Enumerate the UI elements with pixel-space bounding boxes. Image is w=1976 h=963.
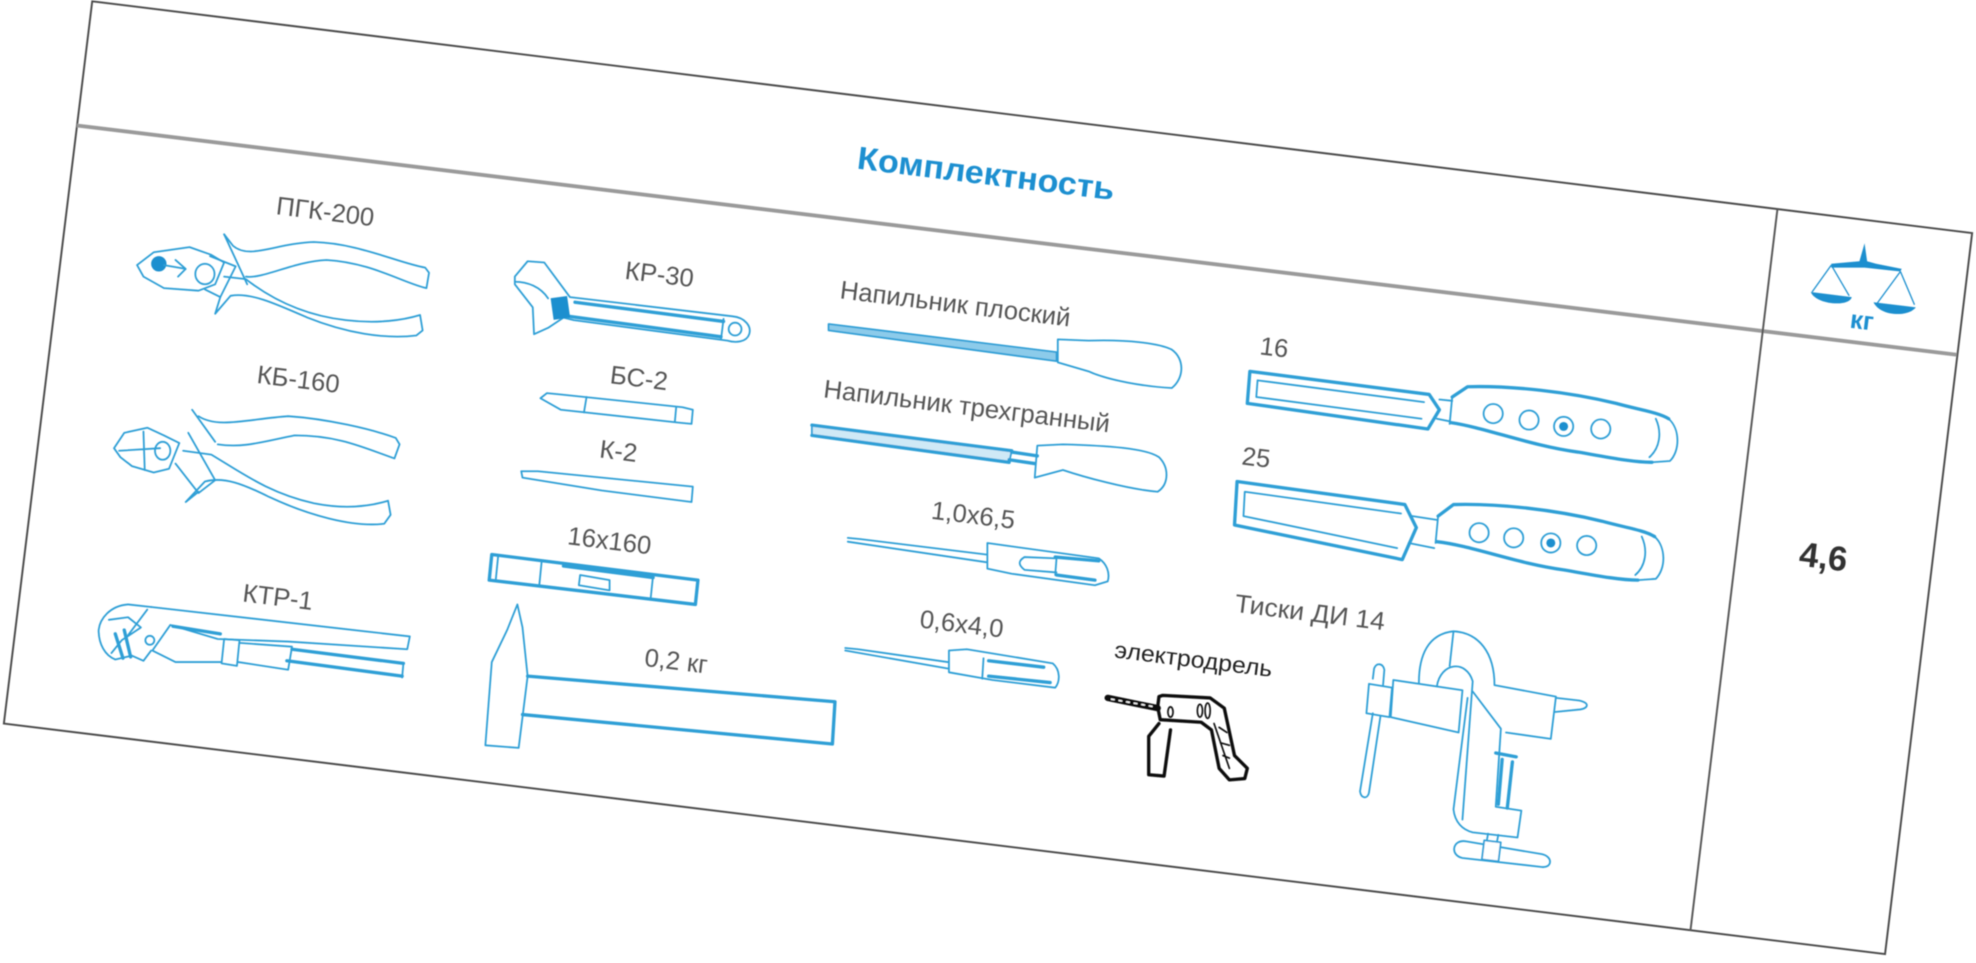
icon: wood chisel 16 bbox=[1247, 371, 1677, 462]
icon: screwdriver small bbox=[845, 648, 1059, 688]
icon: triangular file bbox=[812, 425, 1166, 492]
label: 25: 25 bbox=[1240, 442, 1272, 474]
label: кг: кг bbox=[1849, 306, 1875, 336]
icon: pipe wrench bbox=[99, 604, 410, 677]
label: К-2: К-2 bbox=[598, 436, 639, 468]
label: КБ-160: КБ-160 bbox=[255, 361, 341, 399]
icon: side cutters bbox=[114, 410, 400, 524]
label: КР-30: КР-30 bbox=[623, 257, 695, 293]
label: ПГК-200: ПГК-200 bbox=[275, 192, 376, 232]
icon: flat file bbox=[829, 324, 1181, 388]
label: 0,2 кг: 0,2 кг bbox=[643, 644, 709, 679]
value: 4,6: 4,6 bbox=[1797, 536, 1850, 579]
icon: spirit level bbox=[489, 554, 698, 604]
label: Напильник трехгранный: Напильник трехгранный bbox=[822, 375, 1111, 438]
label: БС-2: БС-2 bbox=[609, 361, 669, 396]
title: Комплектность bbox=[855, 140, 1117, 207]
icon: electric drill bbox=[1108, 695, 1247, 780]
icon: bench vise bbox=[1360, 631, 1587, 867]
icon: hammer bbox=[485, 604, 835, 748]
icon: scales bbox=[1811, 243, 1916, 314]
label: Тиски ДИ 14: Тиски ДИ 14 bbox=[1233, 590, 1387, 636]
label: КТР-1: КТР-1 bbox=[241, 580, 314, 616]
label: 16х160: 16х160 bbox=[566, 522, 653, 560]
icon: combination pliers bbox=[137, 234, 429, 337]
icon: center punch bbox=[540, 393, 693, 424]
icon: wood chisel 25 bbox=[1235, 482, 1663, 580]
label: 1,0х6,5: 1,0х6,5 bbox=[930, 497, 1017, 535]
label: электродрель: электродрель bbox=[1113, 637, 1274, 682]
icon: adjustable wrench bbox=[515, 261, 750, 342]
icon: screwdriver large bbox=[848, 538, 1109, 585]
icon: chisel bar bbox=[521, 471, 693, 502]
label: 16: 16 bbox=[1258, 332, 1290, 364]
label: Напильник плоский: Напильник плоский bbox=[838, 276, 1072, 332]
label: 0,6х4,0: 0,6х4,0 bbox=[918, 606, 1005, 644]
